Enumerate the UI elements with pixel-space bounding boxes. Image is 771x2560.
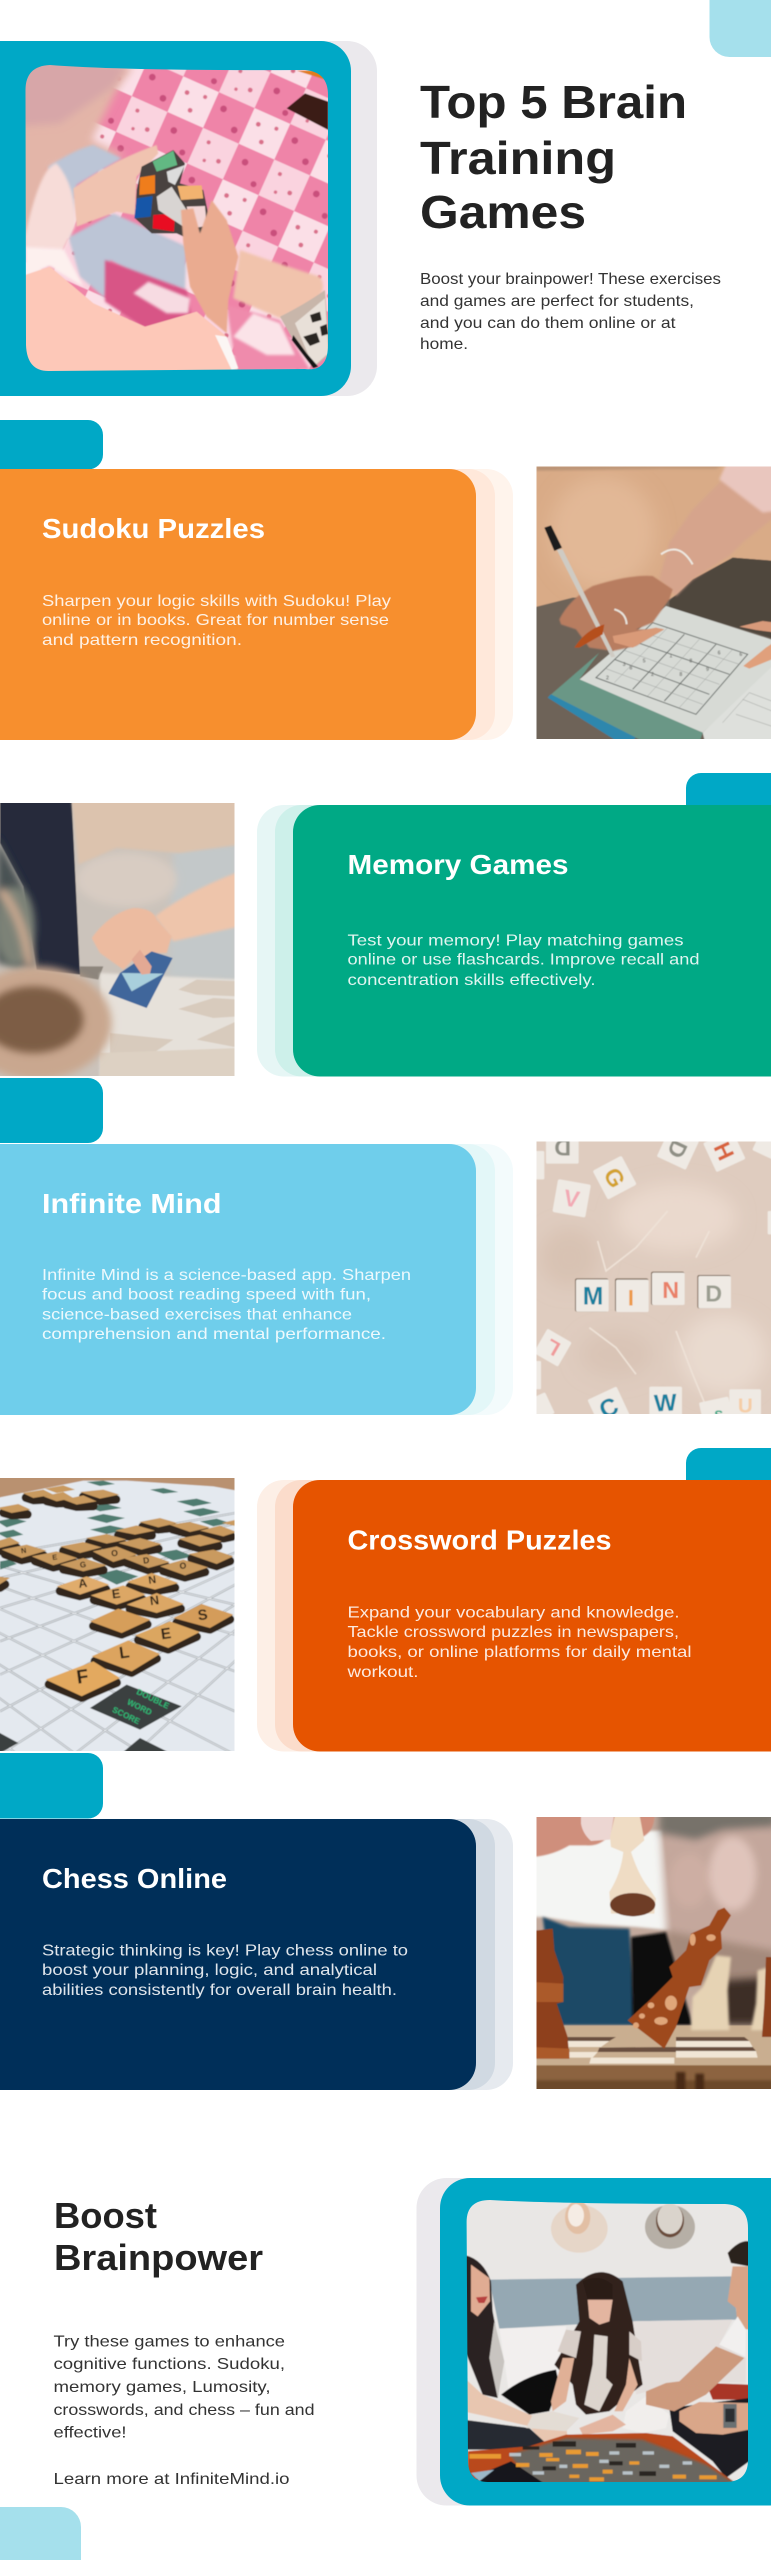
photo: letter tiles spelling MIND on kraft paper: C [595,1393,623,1425]
card text: Tackle crossword puzzles in newspapers, [348,1624,679,1641]
hand, pen, nails [559,576,673,651]
title: Top 5 Brain [420,76,687,128]
photo: letter tiles spelling MIND on kraft paper: H [709,1138,739,1164]
photo: crossword tiles on a game board: A [78,1576,88,1591]
card layers [0,1819,513,2090]
photo: letter tiles spelling MIND on kraft paper: D [554,1135,571,1161]
photo: writing in a sudoku book: 8 [629,665,632,671]
card layers [257,1480,771,1752]
photo: crossword tiles on a game board: N [149,1593,160,1608]
card layers [0,1144,513,1415]
photo: hands solving a puzzle cube [26,65,328,371]
photo: letter tiles spelling MIND on kraft paper [536,1142,771,1414]
photo: letter tiles spelling MIND on kraft paper: L [542,1334,564,1360]
panel: Memory Games [0,773,771,1083]
card layers [0,469,513,740]
man [706,2383,749,2400]
card heading: Chess Online [42,1863,227,1894]
closing heading [54,2195,263,2278]
closing paragraph: effective! [54,2424,126,2442]
photo: writing in a sudoku book: 2 [651,672,654,678]
photo: crossword tiles on a game board: O [179,1560,187,1571]
hero frame [0,41,351,396]
photo: writing in a sudoku book: 3 [623,662,626,668]
closing text [54,2195,314,2488]
white king [609,1814,656,1914]
card text: workout. [346,1664,418,1681]
tab accent [0,420,103,470]
panel: Infinite Mind [0,1078,771,1429]
card text: Sharpen your logic skills with Sudoku! Play [42,593,391,610]
premium squares [0,1481,230,1585]
closing heading: Brainpower [54,2237,263,2278]
right hand [181,200,238,333]
photo: writing in a sudoku book: 8 [679,672,682,678]
tile tops [0,1485,237,1696]
intro paragraph: and you can do them online or at [420,315,676,332]
closing heading: Boost [54,2195,157,2236]
decorative corner: bottom left [0,2507,81,2560]
photo: crossword tiles on a game board: S [197,1607,209,1624]
panel: Chess Online [0,1753,771,2097]
hero frame shadow [0,41,377,396]
tab accent [686,1448,771,1508]
falling bishop [628,1908,731,2049]
photo: child playing a memory card game [0,796,247,1083]
cube [134,150,208,237]
card text: Expand your vocabulary and knowledge. [348,1604,680,1622]
photo: letter tiles spelling MIND on kraft paper: U [738,1395,753,1418]
photo: chess pieces falling [529,1810,771,2097]
title: Games [420,186,586,238]
card text: Infinite Mind is a science-based app. Sharpen [42,1267,411,1284]
card heading: Crossword Puzzles [348,1524,612,1556]
card text: books, or online platforms for daily mental [348,1644,692,1661]
girl [554,2272,643,2415]
card text [42,1942,408,1999]
card text: online or in books. Great for number sense [42,612,389,629]
photo: writing in a sudoku book [529,459,771,746]
photo: crossword tiles on a game board: N [20,1546,27,1555]
closing paragraph: cognitive functions. Sudoku, [54,2356,285,2373]
photo: writing in a sudoku book: 8 [689,659,692,665]
photo: letter tiles spelling MIND on kraft paper: M [583,1284,603,1311]
photo: letter tiles spelling MIND on kraft paper: D [705,1280,722,1306]
puzzle [468,2433,738,2485]
photo: crossword tiles on a game board: WORD [126,1697,154,1717]
pale background pieces [691,1955,769,2030]
frame [440,2178,771,2506]
photo: crossword tiles on a game board: E [52,1552,58,1562]
panel: Sudoku Puzzles [0,420,771,746]
photo: writing in a sudoku book: 6 [718,650,721,656]
card text: concentration skills effectively. [348,972,596,989]
tab accent [0,1753,103,1818]
photo: writing in a sudoku book: 2 [606,675,609,681]
photo: letter tiles spelling MIND on kraft paper: G [598,1163,630,1193]
hero panel [0,41,377,396]
card text: boost your planning, logic, and analytical [42,1962,377,1979]
title [420,76,687,238]
card text: abilities consistently for overall brain health. [42,1982,397,1999]
decorative corner: top right [710,0,771,57]
intro paragraph: Boost your brainpower! These exercises [420,271,721,288]
photo: crossword tiles on a game board: E [111,1587,121,1602]
woman [466,2255,498,2398]
photo: crossword tiles on a game board: O [111,1548,119,1558]
grid [0,1512,234,1751]
closing paragraph: crosswords, and chess – fun and [54,2402,314,2419]
photo: crossword tiles on a game board: N [148,1574,157,1587]
photo: crossword tiles on a game board: E [160,1625,172,1643]
photo: crossword tiles on a game board: D [142,1555,150,1566]
board and table [529,2025,771,2067]
photo: writing in a sudoku book: 9 [706,667,709,673]
photo: crossword tiles on a game board: DOUBLE [135,1686,171,1711]
card text: focus and boost reading speed with fun, [42,1286,371,1304]
fingers [533,1814,654,1857]
card text [348,932,700,989]
intro paragraph [420,271,721,353]
photo: crossword tiles on a game board: F [75,1666,90,1689]
frame shadow [416,2178,771,2506]
card text: science-based exercises that enhance [42,1306,352,1324]
left piece [536,1928,569,2058]
card text: online or use flashcards. Improve recall and [348,952,700,968]
photo: crossword tiles on a game board: SCORE [111,1704,142,1726]
card heading: Memory Games [348,849,568,880]
panel: Crossword Puzzles [0,1448,771,1752]
card heading: Sudoku Puzzles [42,513,265,544]
sleeve and sweater [25,163,75,250]
closing paragraph: memory games, Lumosity, [54,2379,270,2396]
card text: Test your memory! Play matching games [348,932,684,950]
left hand [73,145,158,227]
title: Training [420,132,616,184]
photo: crossword tiles on a game board [0,1478,234,1751]
open book [578,606,771,733]
intro paragraph: and games are perfect for students, [420,293,694,310]
tile sides [0,1496,232,1698]
photo: letter tiles spelling MIND on kraft paper: V [562,1185,582,1213]
closing paragraph [54,2334,314,2442]
tab accent [0,1078,103,1143]
photo: crossword tiles on a game board: G [79,1560,87,1570]
photo: letter tiles spelling MIND on kraft paper: I [628,1285,634,1310]
learn more line: Learn more at InfiniteMind.io [54,2471,290,2488]
card text [42,1267,411,1343]
pillows [500,2327,565,2388]
card text [42,593,391,649]
card layers [257,805,771,1076]
photo: letter tiles spelling MIND on kraft paper: W [653,1389,678,1418]
photo: family doing a jigsaw puzzle [466,2200,748,2482]
headboard [489,2276,738,2329]
intro paragraph: home. [420,336,468,353]
photo: crossword tiles on a game board: L [118,1642,131,1663]
closing image panel [416,2178,771,2506]
tab accent [686,773,771,833]
intro text [420,76,721,353]
hats [551,2205,608,2253]
photo: letter tiles spelling MIND on kraft paper: N [662,1277,679,1303]
photo: writing in a sudoku book: 6 [739,652,742,658]
card text: Strategic thinking is key! Play chess online to [42,1942,408,1960]
card text [346,1604,692,1681]
photo: letter tiles spelling MIND on kraft paper: S [714,1407,723,1422]
closing paragraph: Try these games to enhance [54,2334,285,2350]
card text: and pattern recognition. [42,632,242,649]
card heading: Infinite Mind [42,1188,222,1219]
photo: letter tiles spelling MIND on kraft paper: D [662,1136,693,1162]
photo: writing in a sudoku book: 1 [669,654,672,660]
card text: comprehension and mental performance. [42,1326,386,1343]
photo: writing in a sudoku book: 5 [643,659,646,665]
